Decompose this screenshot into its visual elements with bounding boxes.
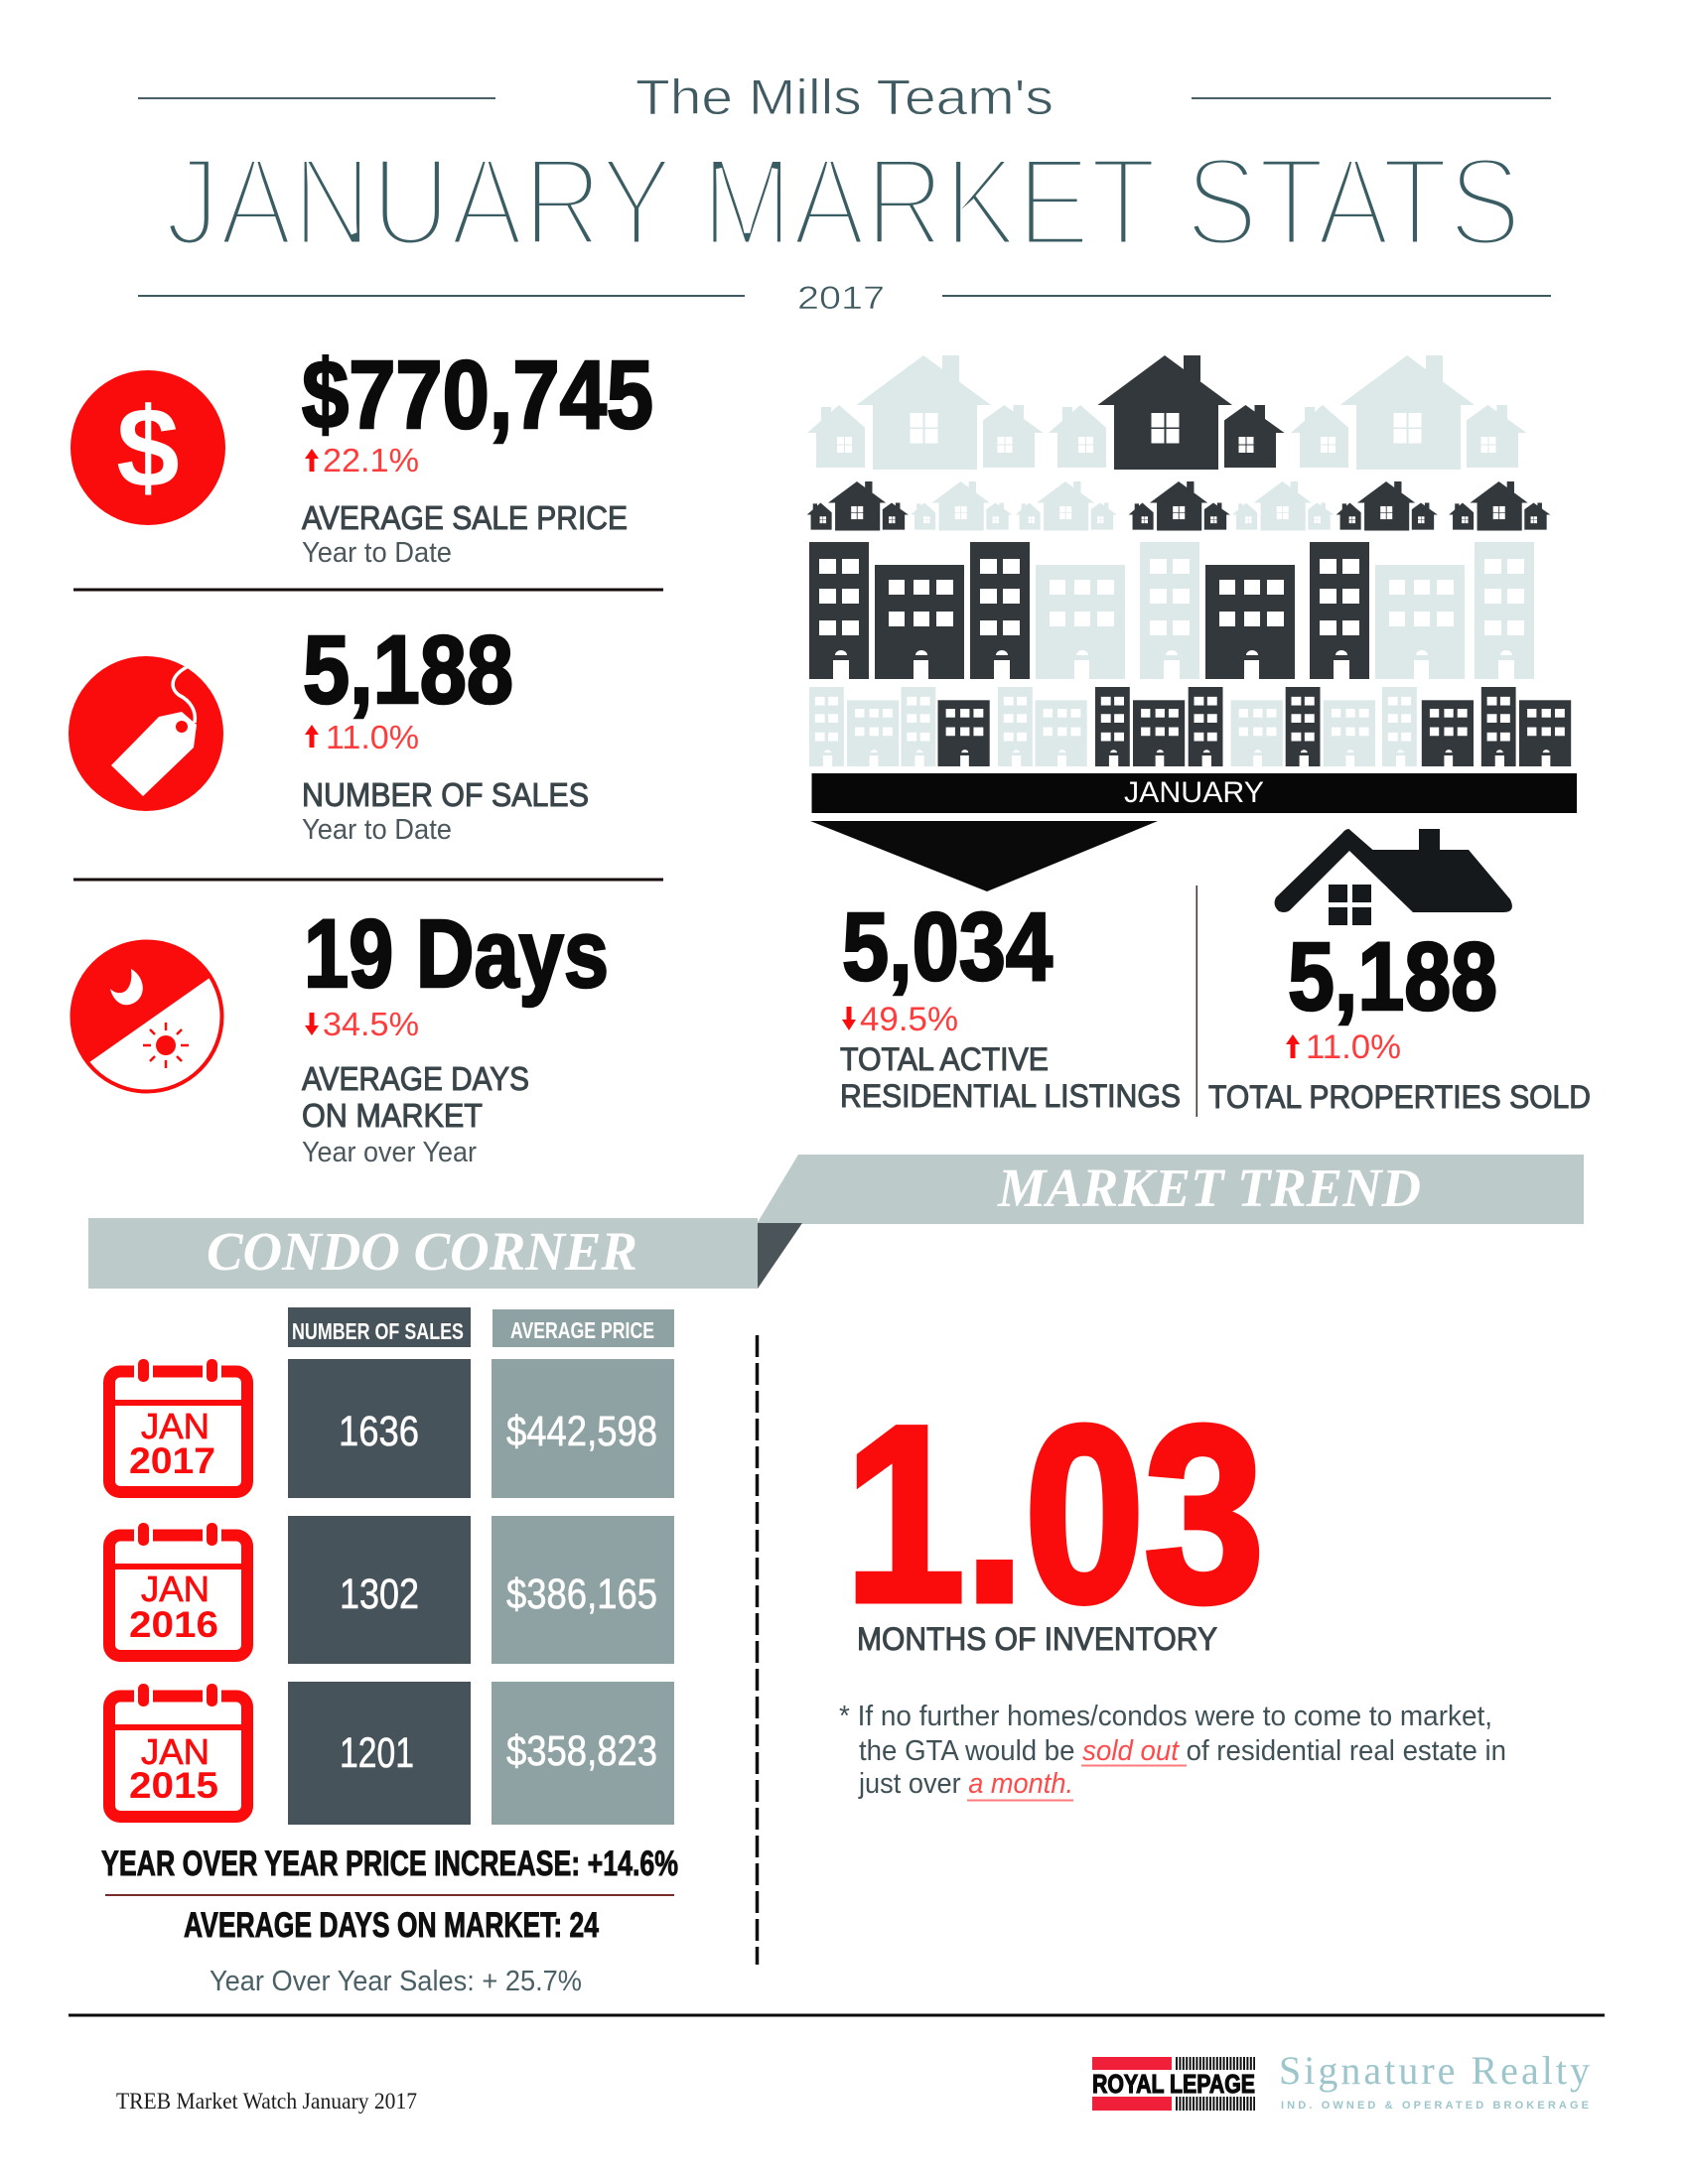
icon: calendar jan 2017 [109, 1357, 247, 1492]
icon: price tag [69, 650, 223, 811]
icon: calendar jan 2017: JAN [141, 1406, 210, 1446]
icon: calendar jan 2015 [109, 1682, 247, 1817]
subtitle: The Mills Team's [635, 69, 1054, 125]
value: 5,034 [842, 892, 1053, 1001]
value: $770,745 [302, 341, 653, 449]
label: AVERAGE SALE PRICE [302, 499, 628, 536]
row 2015: $358,823 [506, 1727, 657, 1775]
row 2017: 1636 [339, 1408, 419, 1455]
stat: active listings [840, 892, 1181, 1114]
value: 19 Days [304, 899, 609, 1008]
banner: condo corner: CONDO CORNER [207, 1221, 637, 1282]
change: 22.1% [323, 442, 419, 478]
label: AVERAGE DAYS [302, 1060, 529, 1097]
row 2015 [288, 1682, 674, 1825]
column header: number of sales: NUMBER OF SALES [292, 1318, 464, 1344]
large houses row [807, 355, 1527, 470]
january bar [812, 773, 1577, 813]
change: 49.5% [860, 1001, 958, 1038]
label line 2: ON MARKET [302, 1097, 483, 1134]
icon: calendar jan 2016: 2016 [129, 1604, 218, 1645]
label: NUMBER OF SALES [302, 776, 589, 813]
footnote: the GTA would be sold out of residential real estate in [859, 1735, 1506, 1767]
header [138, 69, 1551, 316]
label: MONTHS OF INVENTORY [857, 1621, 1217, 1657]
houses and buildings pictogram [807, 355, 1571, 766]
icon: calendar jan 2015: 2015 [129, 1765, 218, 1806]
label line 2: RESIDENTIAL LISTINGS [840, 1078, 1181, 1114]
icon: calendar jan 2015: JAN [141, 1731, 210, 1772]
icon: day and night [70, 940, 222, 1092]
arrow: listings pointer [810, 821, 1158, 891]
row 2017: $442,598 [506, 1408, 657, 1455]
stat: number of sales [69, 615, 589, 846]
banner: condo corner [88, 1218, 802, 1289]
small houses row [807, 481, 1550, 530]
large buildings row [809, 542, 1534, 679]
row 2016: 1302 [340, 1570, 419, 1618]
row 2015: 1201 [340, 1729, 414, 1777]
stat: days on market [70, 899, 609, 1168]
big number: 1.03 [845, 1375, 1264, 1654]
value: 5,188 [303, 615, 513, 724]
vertical dashed divider [756, 1335, 759, 1965]
icon: dollar coin: $ [116, 385, 180, 511]
footnote: just over a month. [858, 1768, 1073, 1800]
row 2016: $386,165 [506, 1570, 657, 1618]
change: 11.0% [1306, 1028, 1401, 1066]
sublabel: Year to Date [302, 537, 452, 569]
change: 11.0% [326, 719, 419, 755]
row 2016 [288, 1516, 674, 1664]
logo: signature realty: IND. OWNED & OPERATED BROKERAGE [1281, 2100, 1589, 2112]
price increase: YEAR OVER YEAR PRICE INCREASE: +14.6% [101, 1844, 678, 1883]
icon: calendar jan 2016 [109, 1521, 247, 1656]
small buildings row [809, 687, 1571, 766]
year over year sales: Year Over Year Sales: + 25.7% [210, 1966, 582, 1997]
source note: TREB Market Watch January 2017 [116, 2089, 417, 2114]
year: 2017 [797, 280, 885, 316]
logo: royal lepage [1092, 2057, 1255, 2111]
column header: average price [492, 1309, 674, 1347]
column header: average price: AVERAGE PRICE [510, 1317, 654, 1343]
main title: JANUARY MARKET STATS [165, 131, 1521, 272]
logo: royal lepage: ROYAL LEPAGE [1092, 2069, 1255, 2099]
value: 5,188 [1288, 922, 1497, 1030]
icon: calendar jan 2016: JAN [141, 1569, 210, 1609]
row 2017 [288, 1359, 674, 1498]
icon: dollar coin [70, 370, 225, 525]
footnote [839, 1701, 1506, 1801]
stat: properties sold [1208, 829, 1591, 1115]
label: TOTAL PROPERTIES SOLD [1208, 1079, 1591, 1115]
days on market: AVERAGE DAYS ON MARKET: 24 [184, 1906, 599, 1945]
icon: house roof [1275, 829, 1512, 925]
banner: market trend: MARKET TREND [997, 1158, 1421, 1218]
table: condo stats [288, 1307, 674, 1825]
january bar: JANUARY [1124, 776, 1264, 809]
label: TOTAL ACTIVE [840, 1041, 1049, 1077]
icon: calendar jan 2017: 2017 [129, 1440, 215, 1481]
stat: average sale price [70, 341, 653, 569]
column header: number of sales [288, 1307, 471, 1347]
change: 34.5% [323, 1006, 419, 1042]
sublabel: Year over Year [302, 1137, 477, 1168]
condo summary [101, 1844, 678, 1997]
logo: signature realty: Signature Realty [1279, 2048, 1590, 2093]
banner: market trend [757, 1155, 1584, 1224]
footnote: * If no further homes/condos were to come to market, [839, 1701, 1492, 1732]
sublabel: Year to Date [302, 814, 452, 846]
market trend content [839, 1375, 1506, 1801]
